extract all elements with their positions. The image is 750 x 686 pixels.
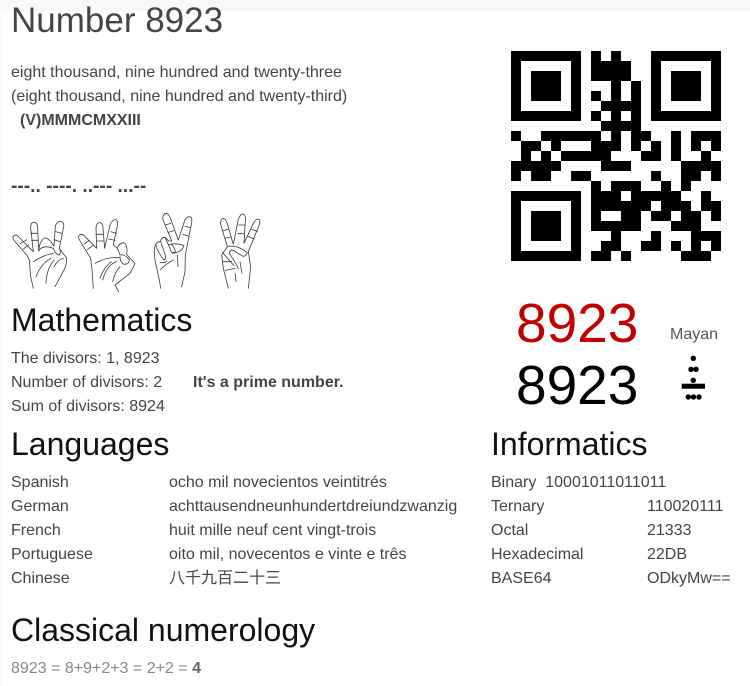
informatics table: Binary 10001011011011	[491, 474, 666, 491]
number names text block: eight thousand, nine hundred and twenty-three	[11, 64, 342, 81]
icon: Mayan numeral	[682, 356, 705, 400]
informatics table: 21333	[647, 522, 692, 539]
hand sign 9	[79, 220, 135, 292]
informatics table: Ternary	[491, 498, 544, 515]
heading: Informatics: Informatics	[491, 426, 647, 462]
informatics table: Hexadecimal	[491, 546, 583, 563]
number in red: 8923	[516, 292, 638, 354]
number names text block: (eight thousand, nine hundred and twenty-third)	[11, 88, 347, 105]
mathematics text block: The divisors: 1, 8923	[11, 350, 160, 367]
languages table	[11, 474, 457, 587]
morse code: ---.. ----. ..--- ...--	[11, 176, 146, 197]
informatics table: 110020111	[647, 498, 724, 515]
hand sign 3	[221, 214, 260, 288]
number names text block: (V)MMMCMXXIII	[20, 112, 141, 129]
languages table: Chinese	[11, 570, 70, 587]
title: Number 8923	[11, 1, 223, 40]
hand sign 2	[154, 213, 192, 288]
heading: Mathematics: Mathematics	[11, 302, 192, 338]
number in black: 8923	[516, 354, 638, 416]
informatics table: 22DB	[647, 546, 687, 563]
QR code	[511, 51, 721, 261]
mathematics text block: Sum of divisors: 8924	[11, 398, 165, 415]
mathematics text block	[11, 350, 344, 415]
languages table: 八千九百二十三	[169, 570, 281, 587]
hand sign 8	[13, 221, 67, 288]
languages table: Spanish	[11, 474, 69, 491]
languages table: German	[11, 498, 69, 515]
numerology formula: 8923 = 8+9+2+3 = 2+2 = 4	[11, 660, 201, 677]
heading: Languages: Languages	[11, 426, 169, 462]
label: Mayan: Mayan	[670, 326, 718, 343]
languages table: oito mil, novecentos e vinte e três	[169, 546, 406, 563]
informatics table: BASE64	[491, 570, 551, 587]
heading: Classical numerology: Classical numerology	[11, 612, 315, 648]
languages table: Portuguese	[11, 546, 93, 563]
mathematics text block: It's a prime number.	[193, 374, 344, 391]
icon: sign language hands	[12, 212, 260, 292]
languages table: ocho mil novecientos veintitrés	[169, 474, 387, 491]
languages table: achttausendneunhundertdreiundzwanzig	[169, 498, 457, 515]
informatics table: ODkyMw==	[647, 570, 731, 587]
languages table: huit mille neuf cent vingt-trois	[169, 522, 376, 539]
mathematics text block: Number of divisors: 2	[11, 374, 162, 391]
languages table: French	[11, 522, 61, 539]
number names text block	[11, 64, 347, 129]
informatics table	[491, 474, 731, 587]
informatics table: Octal	[491, 522, 528, 539]
